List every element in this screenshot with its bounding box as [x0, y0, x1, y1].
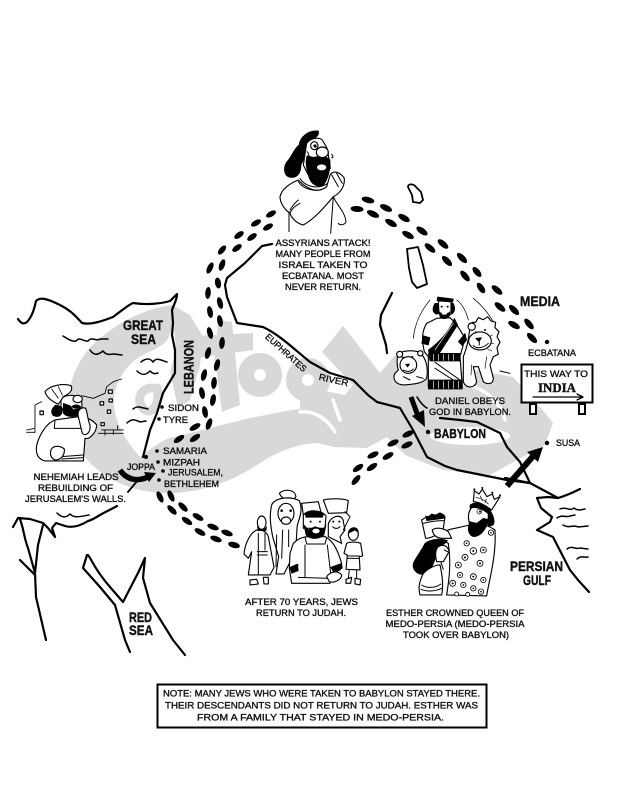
caption: Assyrians attack: ECBATANA. MOST — [282, 271, 364, 282]
waves: Persian Gulf — [557, 508, 588, 559]
footprints: Jerusalem to return group — [155, 489, 241, 549]
label: Lebanon: LEBANON — [180, 340, 196, 394]
footprints: Babylon to Judah — [350, 429, 415, 486]
figure: praying man — [280, 131, 346, 233]
map: Euphrates river — [225, 244, 558, 498]
note box: FROM A FAMILY THAT STAYED IN MEDO-PERSIA. — [197, 712, 444, 724]
city labels: Samaria, Mizpah, Jerusalem, Bethlehem: JERUSALEM, — [168, 468, 223, 478]
caption: Esther: TOOK OVER BABYLON) — [403, 630, 509, 641]
caption: Nehemiah: NEHEMIAH LEADS — [34, 472, 118, 483]
label: Persian Gulf: GULF — [523, 572, 551, 588]
figure: group returning to Judah — [244, 490, 363, 585]
caption: Assyrians attack: ISRAEL TAKEN TO — [278, 260, 368, 271]
map: Egypt coast and Nile — [13, 506, 117, 640]
caption: Nehemiah: REBUILDING OF — [38, 483, 113, 494]
note box — [158, 684, 486, 728]
caption: return to Judah: AFTER 70 YEARS, JEWS — [245, 597, 358, 608]
caption: Daniel: GOD IN BABYLON. — [429, 407, 511, 418]
note box: NOTE: MANY JEWS WHO WERE TAKEN TO BABYLON STAYED THERE. — [163, 688, 480, 700]
city labels: Sidon and Tyre: SIDON — [168, 403, 199, 414]
label: Red Sea: RED — [129, 609, 152, 625]
island: large — [407, 247, 427, 288]
map: Mediterranean coast — [18, 294, 177, 457]
city labels: Samaria, Mizpah, Jerusalem, Bethlehem: BETHLEHEM — [164, 479, 219, 490]
arrow: Joppa to Jerusalem — [120, 470, 156, 492]
city labels: Samaria, Mizpah, Jerusalem, Bethlehem: MIZPAH — [163, 458, 200, 468]
caption: Esther: MEDO-PERSIA (MEDO-PERSIA — [386, 619, 525, 630]
label: Great Sea: SEA — [131, 331, 156, 347]
city labels: Sidon and Tyre: TYRE — [163, 415, 188, 426]
footprints: Israel to Ecbatana — [172, 209, 277, 445]
footprints: to Ecbatana, right arc — [350, 195, 539, 345]
label: Persian Gulf: PERSIAN — [510, 558, 563, 574]
label: Susa — [545, 438, 581, 449]
label: Red Sea: SEA — [129, 622, 153, 638]
caption: return to Judah: RETURN TO JUDAH. — [256, 608, 346, 619]
caption: Nehemiah: JERUSALEM'S WALLS. — [25, 494, 126, 505]
label: Euphrates: EUPHRATES — [263, 332, 309, 374]
label: Great Sea: GREAT — [123, 317, 163, 333]
city labels: Sidon and Tyre — [157, 403, 199, 426]
caption: Assyrians attack: MANY PEOPLE FROM — [276, 249, 371, 260]
waves: Great Sea — [57, 336, 167, 517]
city label: Joppa: JOPPA — [127, 462, 156, 473]
note box: THEIR DESCENDANTS DID NOT RETURN TO JUDAH. ESTHER WAS — [165, 700, 478, 712]
label: Susa: SUSA — [556, 438, 581, 449]
caption: Assyrians attack: NEVER RETURN. — [285, 282, 361, 293]
city label: Joppa — [127, 455, 156, 473]
map: Caspian area line — [380, 293, 392, 353]
watermark logo — [68, 305, 553, 493]
label: Ecbatana: ECBATANA — [528, 348, 577, 359]
caption: Assyrians attack: ASSYRIANS ATTACK! — [276, 238, 370, 249]
figure: Daniel with lions — [394, 297, 510, 389]
caption: Esther: ESTHER CROWNED QUEEN OF — [386, 608, 524, 619]
figure: Esther crowned — [413, 487, 501, 596]
city labels: Samaria, Mizpah, Jerusalem, Bethlehem — [155, 446, 223, 490]
label: River: RIVER — [318, 372, 350, 388]
arrow: to Susa — [507, 447, 543, 486]
signpost: this way to India: INDIA — [538, 380, 577, 395]
map: Persian Gulf coast — [537, 489, 589, 592]
signpost: this way to India: THIS WAY TO — [524, 369, 588, 380]
label: Media: MEDIA — [520, 293, 560, 309]
figure: Nehemiah — [27, 379, 123, 461]
arrow: to Babylon — [411, 397, 427, 427]
caption: Daniel: DANIEL OBEYS — [435, 396, 505, 407]
map: Tigris river — [440, 418, 530, 483]
label: Babylon: BABYLON — [434, 426, 486, 441]
signpost: this way to India — [522, 364, 592, 414]
city labels: Samaria, Mizpah, Jerusalem, Bethlehem: SAMARIA — [163, 446, 208, 457]
label: Ecbatana — [528, 340, 577, 359]
island: small — [408, 184, 423, 203]
map: Red Sea — [83, 555, 185, 655]
